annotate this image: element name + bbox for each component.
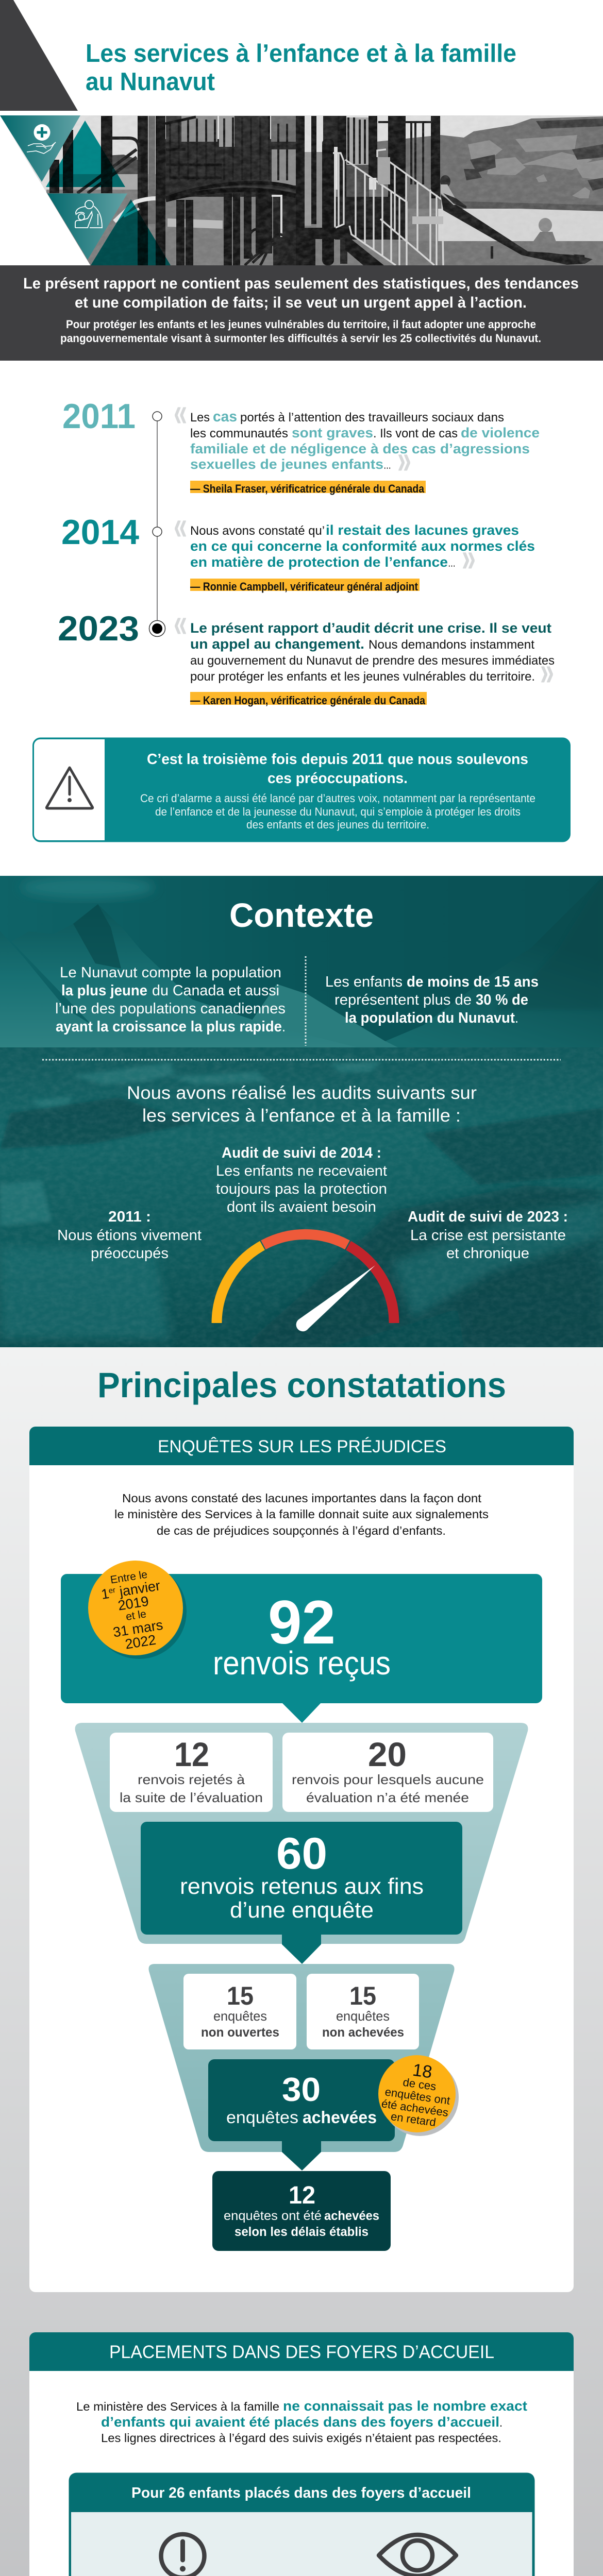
icon: warning triangle xyxy=(46,768,93,808)
intro paragraph: de cas de préjudices soupçonnés à l’égard d’enfants. xyxy=(157,1524,446,1537)
quote 2023 xyxy=(174,600,555,694)
2014 entry xyxy=(61,502,535,593)
gauge xyxy=(216,1234,394,1331)
box: 92 referrals: renvois reçus xyxy=(213,1645,391,1682)
box: 12 on time: enquêtes ont été xyxy=(224,2209,322,2223)
divider horizontal xyxy=(42,1059,561,1060)
funnel top level xyxy=(75,1723,528,1944)
intro heading xyxy=(23,275,579,311)
table: requirement vs observation xyxy=(69,2473,534,2576)
findings background xyxy=(0,1347,603,2576)
quote 2011: Les xyxy=(190,411,210,425)
quote 2011: portés à l’attention des travailleurs sociaux dans xyxy=(240,411,504,425)
badge: date range: Entre le xyxy=(109,1569,148,1586)
photo: children at a playground xyxy=(0,115,603,265)
intro sub-text xyxy=(60,318,541,345)
badge: date range: er xyxy=(108,1586,116,1596)
box: 20 not assessed xyxy=(282,1733,493,1812)
context fact: youngest population xyxy=(55,964,286,1035)
dark corner triangle xyxy=(0,0,78,111)
teal triangle with parent and child icon xyxy=(47,194,127,260)
panel header: PLACEMENTS DANS DES FOYERS D’ACCUEIL xyxy=(109,2342,494,2362)
callout heading: C’est la troisième fois depuis 2011 que nous soulevons xyxy=(147,751,528,768)
box: 60 retained: 60 xyxy=(276,1829,327,1878)
callout heading: ces préoccupations. xyxy=(267,770,408,787)
badge: 18 late: été achevées xyxy=(381,2097,449,2119)
badge: 18 late: en retard xyxy=(390,2110,437,2129)
quote 2014 xyxy=(174,502,535,580)
audit 2014: toujours pas la protection xyxy=(216,1181,387,1197)
quote 2014: Nous avons constaté qu’ xyxy=(190,524,325,538)
box: 92 referrals xyxy=(61,1574,542,1723)
panel: enquêtes sur les préjudices xyxy=(29,1427,574,2292)
thin dark bars xyxy=(170,116,431,184)
audit 2011: préoccupés xyxy=(91,1245,169,1262)
quote 2011: . Ils vont de cas xyxy=(373,427,458,440)
box: 15 not completed xyxy=(307,1974,419,2049)
quote 2011: … xyxy=(383,458,391,472)
icon: adult with child xyxy=(75,200,102,228)
panel header: ENQUÊTES SUR LES PRÉJUDICES xyxy=(158,1437,446,1456)
table: requirement vs observation: Pour 26 enfants placés dans des foyers d’accueil xyxy=(131,2485,471,2501)
box: 30 completed: 30 xyxy=(282,2071,321,2108)
context fact: youngest population: ayant la croissance la plus rapide xyxy=(56,1019,282,1035)
badge: date range: 2022 xyxy=(124,1632,157,1652)
callout text: des enfants et des jeunes du territoire. xyxy=(246,818,429,831)
quote 2023: Nous demandons instamment xyxy=(368,638,534,652)
callout heading xyxy=(147,751,528,787)
box: 15 not completed: enquêtes xyxy=(336,2008,390,2024)
audit 2011: Nous étions vivement xyxy=(57,1227,202,1244)
audit 2014: dont ils avaient besoin xyxy=(227,1199,376,1215)
audits intro: Nous avons réalisé les audits suivants sur xyxy=(127,1083,477,1103)
header title area xyxy=(0,0,516,111)
badge: date range xyxy=(88,1561,187,1659)
quote 2014: il restait des lacunes graves xyxy=(326,522,519,538)
icon: eye xyxy=(379,2535,456,2576)
quote 2023: « xyxy=(174,600,187,646)
title: Les services à l’enfance et à la famille xyxy=(86,40,516,67)
badge: 18 late: enquêtes ont xyxy=(384,2085,451,2107)
audits intro xyxy=(127,1083,477,1126)
context fact: under 15 xyxy=(325,974,539,1026)
funnel second level xyxy=(148,1964,455,2152)
box: 15 not opened: enquêtes xyxy=(213,2008,267,2024)
quote 2014: en ce qui concerne la conformité aux normes clés xyxy=(190,538,535,554)
quote 2011: de violence xyxy=(461,425,540,440)
landscape background xyxy=(0,876,603,1347)
intro paragraph xyxy=(114,1492,489,1537)
child at top of slide xyxy=(440,175,450,187)
context fact: youngest population: du Canada et aussi xyxy=(152,982,279,999)
teal overlay triangles xyxy=(46,121,171,265)
title: au Nunavut xyxy=(86,68,215,96)
grain texture over photo xyxy=(0,115,603,265)
panel header xyxy=(29,2332,574,2371)
box: 12 rejected: renvois rejetés à xyxy=(138,1772,245,1787)
box: 30 completed: achevées xyxy=(303,2108,377,2127)
quote 2023: » xyxy=(540,648,554,694)
heading: Principales constatations: Principales constatations xyxy=(97,1365,506,1405)
intro paragraph xyxy=(76,2398,527,2445)
intro paragraph: le ministère des Services à la famille donnait suite aux signalements xyxy=(114,1507,489,1521)
year 2023: 2023 xyxy=(58,609,139,648)
box: 12 on time: 12 xyxy=(289,2182,315,2209)
badge: 18 late: 18 xyxy=(411,2060,433,2082)
timeline axis xyxy=(149,412,165,637)
icon: exclamation xyxy=(161,2534,204,2576)
quote 2023: au gouvernement du Nunavut de prendre des mesures immédiates xyxy=(190,654,555,668)
audit 2011 xyxy=(57,1209,202,1262)
heading: Contexte: Contexte xyxy=(229,896,374,934)
callout: third time concerns raised xyxy=(33,738,570,841)
attribution 2011: — Sheila Fraser, vérificatrice générale du Canada xyxy=(190,482,425,495)
quote 2023: un appel au changement. xyxy=(190,636,364,652)
title xyxy=(86,40,516,96)
icon: hand holding medical cross xyxy=(27,124,56,154)
quote 2023: Le présent rapport d’audit décrit une crise. Il se veut xyxy=(190,620,551,636)
quote 2011 xyxy=(174,389,540,482)
context fact: under 15: la population du Nunavut xyxy=(345,1010,515,1026)
box: 60 retained xyxy=(141,1822,462,1964)
intro heading: et une compilation de faits; il se veut un urgent appel à l’action. xyxy=(75,294,527,311)
quote 2014: … xyxy=(448,556,456,570)
intro heading: Le présent rapport ne contient pas seulement des statistiques, des tendances xyxy=(23,275,579,292)
box: 15 not opened: 15 xyxy=(227,1981,254,2010)
callout text: de l’enfance et de la jeunesse du Nunavut, qui s’emploie à protéger les droits xyxy=(155,805,521,818)
context fact: youngest population: la plus jeune xyxy=(61,982,147,999)
panel: placements dans des foyers d'accueil xyxy=(29,2332,574,2576)
audits intro: les services à l’enfance et à la famille : xyxy=(142,1106,461,1126)
white triangle at photo left xyxy=(0,115,91,266)
context fact: youngest population: l’une des populations canadiennes xyxy=(55,1001,286,1017)
coiled hoses xyxy=(244,228,282,265)
intro paragraph: Le ministère des Services à la famille xyxy=(76,2400,279,2413)
audit 2011: 2011 : xyxy=(108,1209,151,1225)
attribution 2023: — Karen Hogan, vérificatrice générale du Canada xyxy=(190,694,426,707)
stair railings xyxy=(333,149,443,265)
callout text: Ce cri d’alarme a aussi été lancé par d’autres voix, notamment par la représentante xyxy=(140,792,535,805)
callout text xyxy=(140,792,535,831)
box: 12 rejected xyxy=(110,1733,273,1812)
box: 30 completed: enquêtes xyxy=(226,2108,298,2127)
badge: date range: janvier xyxy=(114,1578,161,1600)
intro paragraph: Nous avons constaté des lacunes importantes dans la façon dont xyxy=(122,1492,482,1505)
intro sub-text: pangouvernementale visant à surmonter les difficultés à servir les 25 collectivités du Nunavut. xyxy=(60,332,541,345)
box: 60 retained: d’une enquête xyxy=(230,1897,374,1923)
box: 20 not assessed: renvois pour lesquels aucune xyxy=(292,1772,484,1787)
badge: date range: 1 xyxy=(100,1586,110,1602)
intro paragraph: . xyxy=(499,2416,502,2429)
intro paragraph: ne connaissait pas le nombre exact xyxy=(283,2398,527,2414)
box: 12 on time: achevées xyxy=(324,2209,379,2223)
slide xyxy=(441,195,585,265)
intro paragraph: Les lignes directrices à l’égard des suivis exigés n’étaient pas respectées. xyxy=(101,2431,501,2445)
box: 15 not opened: non ouvertes xyxy=(201,2025,279,2040)
context fact: under 15: Les enfants xyxy=(325,974,403,990)
box: 12 rejected: 12 xyxy=(174,1735,209,1773)
dark intro band xyxy=(0,265,603,361)
badge: date range: et le xyxy=(125,1608,147,1623)
context fact: youngest population: . xyxy=(282,1019,286,1035)
context fact: youngest population: Le Nunavut compte la population xyxy=(60,964,281,981)
badge: 18 late: de ces xyxy=(402,2076,437,2093)
box: 15 not opened xyxy=(183,1974,296,2049)
context fact: under 15: 30 % de xyxy=(476,992,528,1008)
intro paragraph: d’enfants qui avaient été placés dans des foyers d’accueil xyxy=(101,2414,499,2430)
audit 2014 xyxy=(216,1145,387,1215)
child at foot of slide xyxy=(539,218,552,232)
audit 2014: Audit de suivi de 2014 : xyxy=(222,1145,381,1161)
quote 2023: pour protéger les enfants et les jeunes vulnérables du territoire. xyxy=(190,670,535,684)
audit 2014: Les enfants ne recevaient xyxy=(216,1163,387,1179)
divider vertical xyxy=(305,956,306,1046)
panel: contexte xyxy=(0,876,603,1347)
quote 2014: en matière de protection de l’enfance xyxy=(190,554,448,570)
quote 2011: » xyxy=(397,436,411,482)
box: 12 on time: selon les délais établis xyxy=(234,2225,368,2239)
context fact: under 15: . xyxy=(515,1010,518,1026)
dark play structure xyxy=(49,116,440,265)
box: 30 completed xyxy=(208,2059,395,2171)
audit 2023 xyxy=(408,1209,568,1262)
teal triangle with care icon xyxy=(0,115,80,182)
attribution 2014: — Ronnie Campbell, vérificateur général adjoint xyxy=(190,580,418,593)
box: 15 not completed: 15 xyxy=(349,1981,376,2010)
arch of the bridge xyxy=(166,183,296,198)
quote 2011: familiale et de négligence à des cas d’agressions xyxy=(190,441,530,456)
quote 2014: « xyxy=(174,502,187,548)
quote 2011: les communautés xyxy=(190,427,288,440)
quote 2014: » xyxy=(462,534,476,580)
quote 2011: sexuelles de jeunes enfants xyxy=(190,456,383,472)
panel header xyxy=(29,1427,574,1465)
quote 2011: cas xyxy=(213,409,237,425)
box: 12 rejected: la suite de l’évaluation xyxy=(120,1790,263,1805)
box: 60 retained: renvois retenus aux fins xyxy=(180,1874,424,1899)
badge: date range: 31 mars xyxy=(112,1617,164,1640)
year 2014: 2014 xyxy=(61,513,139,552)
badge: date range: 2019 xyxy=(117,1594,150,1614)
audit 2023: La crise est persistante xyxy=(410,1227,566,1244)
badge: 18 late xyxy=(378,2055,459,2136)
2023 entry xyxy=(58,600,555,707)
audit 2023: et chronique xyxy=(446,1245,529,1262)
box: 20 not assessed: évaluation n’a été menée xyxy=(306,1790,469,1805)
audit 2023: Audit de suivi de 2023 : xyxy=(408,1209,568,1225)
box: 20 not assessed: 20 xyxy=(368,1735,407,1773)
year 2011: 2011 xyxy=(62,397,136,436)
quote 2011: sont graves xyxy=(292,425,373,440)
context fact: under 15: représentent plus de xyxy=(334,992,472,1008)
intro sub-text: Pour protéger les enfants et les jeunes vulnérables du territoire, il faut adopter une approche xyxy=(66,318,536,331)
timeline xyxy=(58,389,555,707)
quote 2011: « xyxy=(174,389,187,435)
2011 entry xyxy=(62,389,540,495)
box: 15 not completed: non achevées xyxy=(322,2025,404,2040)
diagonal side rails xyxy=(77,138,139,222)
box: 12 on time xyxy=(212,2171,391,2251)
context fact: under 15: de moins de 15 ans xyxy=(407,974,539,990)
box: 92 referrals: 92 xyxy=(268,1588,336,1657)
